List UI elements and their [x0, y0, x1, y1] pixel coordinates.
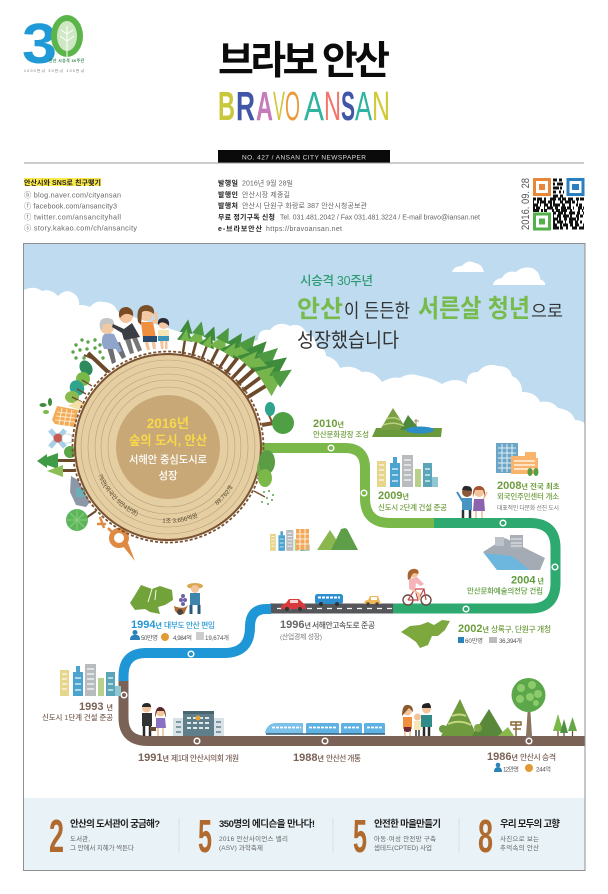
icon: Daebu island map: [130, 585, 173, 614]
right side trees of the stump: [254, 402, 294, 505]
stump text: 서해안 중심도시로: [129, 453, 207, 466]
stump statistics: [98, 474, 233, 524]
SNS links: ⓢ story.kakao.com/ch/ansancity: [24, 224, 137, 232]
headline: 성장했습니다: [297, 329, 399, 352]
publication details: 안산시장 제종길: [242, 190, 290, 199]
item: page 5 Edison: 350명의 에디슨을 만나다!: [219, 818, 315, 830]
item: page 8: [478, 810, 560, 862]
frame border: [24, 244, 585, 870]
title: 브라보 안산: 브라보 안산: [218, 40, 390, 83]
icon: couple: [457, 486, 487, 518]
2004 milestone: 2004 년: [511, 574, 544, 586]
logo: 30th anniversary: 3: [22, 12, 57, 76]
1993 milestone: 신도시 1단계 건설 준공: [42, 712, 113, 722]
title: BRAVO ANSAN: A: [256, 83, 273, 129]
icon: council members: [142, 703, 166, 736]
2002 milestone: 상록구, 단원구 개청: [491, 624, 551, 634]
1993 milestone: 1993 년: [79, 701, 113, 713]
issue banner: NO. 427 / ANSAN CITY NEWSPAPER: [242, 154, 366, 162]
item: page 8: 8: [478, 810, 493, 862]
decorative city and mountains: [270, 523, 358, 551]
road interchange: [97, 517, 135, 561]
1994 milestone: 1994년: [131, 619, 162, 631]
icon: large tree: [512, 678, 546, 736]
publication details: 발행처: [218, 201, 238, 210]
title: BRAVO ANSAN: [218, 83, 390, 129]
item: page 5 safety: 셉테드(CPTED) 사업: [374, 843, 432, 852]
round tree: [66, 509, 96, 531]
item: page 5 Edison: [198, 810, 315, 862]
1996 milestone: [280, 619, 375, 641]
item: page 2: [49, 810, 160, 862]
publication details: e-브라보안산: [218, 224, 263, 233]
item: page 5 safety: [353, 810, 441, 862]
2009 milestone: 신도시 2단계 건설 준공: [378, 502, 447, 512]
stump statistics: 75만(외국인 5만4천명): [98, 474, 138, 516]
2009 milestone: 2009년: [378, 490, 409, 502]
1986 milestone: 1986년: [487, 751, 518, 763]
logo: 30th anniversary: 1000만㎡ 30만㎡ 100만㎡: [24, 68, 84, 73]
SNS links: ⓣ twitter.com/ansancityhall: [24, 212, 121, 222]
SNS links: 안산시와 SNS로 친구맺기: [24, 178, 101, 187]
daughter: [158, 318, 169, 349]
title: BRAVO ANSAN: S: [341, 83, 355, 129]
2008 milestone: 외국인주민센터 개소: [497, 491, 559, 501]
item: page 2: 도서관,: [70, 834, 90, 843]
conifer forest on the tree stump: [175, 318, 298, 407]
stump statistics: 1조 3,656억원: [162, 512, 198, 524]
publication details: 2016년 9월 28일: [242, 178, 293, 188]
title: BRAVO ANSAN: N: [324, 83, 341, 129]
publication details: 무료 정기구독 신청: [218, 212, 275, 222]
1991 milestone: [138, 703, 239, 764]
2010 milestone: 안산문화광장 조성: [313, 429, 369, 439]
2002 milestone: 60만명: [465, 637, 483, 645]
logo: 30th anniversary: 안산 시승격 30주년: [49, 58, 84, 63]
1986 milestone: 12만명: [503, 766, 519, 774]
publication details: [218, 178, 480, 233]
yellow car: [364, 596, 381, 606]
title: BRAVO ANSAN: V: [273, 83, 285, 129]
father: [112, 307, 142, 354]
vehicles on the highway: [281, 594, 381, 611]
2010 milestone: 2010년: [313, 418, 344, 430]
red car: [281, 599, 306, 611]
stump text: 숲의 도시, 안산: [129, 433, 207, 448]
headline: [297, 274, 563, 352]
item: page 5 Edison: 2016 안산사이언스 밸리: [219, 834, 288, 843]
publication details: 발행인: [218, 190, 238, 199]
icon: center building: [496, 443, 538, 476]
tree stump: [72, 352, 264, 542]
1986 milestone: [402, 678, 577, 774]
1994 milestone: 4,984억: [173, 634, 192, 642]
title: BRAVO ANSAN: A: [304, 83, 324, 129]
1988 milestone: 1988년: [293, 752, 324, 764]
1994 milestone: [130, 583, 229, 642]
title: BRAVO ANSAN: N: [372, 83, 390, 129]
headline: 서른살 청년: [418, 295, 530, 323]
logo: 30th anniversary: [22, 12, 84, 76]
left side trees and buildings: [37, 338, 135, 561]
SNS links: [24, 178, 137, 232]
grandfather: [100, 318, 126, 364]
icon: small conifers: [553, 714, 577, 736]
2004 milestone: [467, 535, 545, 596]
2002 milestone: 36,394개: [499, 637, 522, 645]
family on the stump: [100, 305, 169, 364]
SNS links: ⓕ facebook.com/ansancity3: [24, 202, 117, 210]
stump statistics: 89,762개: [215, 484, 233, 504]
panel: infographic frame: [24, 244, 585, 870]
cyclist: [403, 568, 431, 605]
1996 milestone: 서해안고속도로 준공: [312, 620, 375, 630]
mother: [137, 305, 158, 350]
blue bus: [315, 594, 343, 606]
1991 milestone: 1991년: [138, 752, 169, 764]
road nodes: [121, 445, 558, 744]
1988 milestone: 안산선 개통: [326, 753, 361, 763]
side conifers: [37, 453, 76, 477]
1991 milestone: 제1대 안산시의회 개원: [171, 753, 239, 763]
title: BRAVO ANSAN: B: [218, 83, 235, 129]
icon: park: [372, 408, 442, 437]
item: page 2: 안산의 도서관이 궁금해?: [70, 818, 160, 830]
headline: 시승격 30주년: [300, 274, 373, 288]
stump text: 2016년: [147, 416, 189, 431]
item: page 8: 추억속의 안산: [500, 843, 539, 852]
icon: mountains: [439, 699, 514, 736]
title: BRAVO ANSAN: O: [285, 83, 300, 129]
2009 milestone: [377, 455, 447, 512]
2010 milestone: [313, 408, 442, 439]
2008 milestone: [457, 443, 560, 518]
2002 milestone: [401, 620, 551, 648]
icon: subway train: [265, 723, 385, 734]
1994 milestone: 50만명: [141, 634, 158, 642]
item: page 2: 그 안에서 지혜가 싹튼다: [70, 843, 134, 852]
item: page 5 Edison: (ASV) 과학축제: [219, 843, 263, 852]
item: page 5 safety: 아동·여성 안전망 구축: [374, 834, 436, 843]
publication details: 안산시 단원구 화랑로 387 안산시청공보관: [242, 201, 368, 210]
industrial machine: [70, 476, 90, 507]
item: page 5 safety: 5: [353, 810, 367, 862]
icon: city hall: [173, 711, 224, 736]
headline: 안산: [297, 296, 343, 323]
1993 milestone: [42, 664, 121, 722]
stump text: [129, 416, 207, 482]
SNS links: ⓑ blog.naver.com/cityansan: [24, 190, 121, 200]
1994 milestone: 대부도 안산 편입: [164, 620, 215, 630]
1986 milestone: 안산시 승격: [520, 752, 556, 762]
2008 milestone: 2008년 전국 최초: [497, 480, 560, 492]
issue banner: [24, 150, 584, 164]
icon: art center building: [483, 535, 545, 570]
item: page 8: 우리 모두의 고향: [500, 818, 560, 830]
road timeline: [124, 448, 585, 741]
publication details: Tel. 031.481.2042 / Fax 031.481.3224 / E-mail bravo@iansan.net: [280, 214, 480, 222]
icon: signpost: [511, 722, 521, 736]
publication details: https://bravoansan.net: [266, 226, 342, 233]
headline: 으로: [531, 302, 563, 321]
1996 milestone: (산업경제 성장): [280, 632, 322, 641]
title: BRAVO ANSAN: A: [355, 83, 372, 129]
2002 milestone: 2002년: [458, 623, 489, 635]
2004 milestone: 안산문화예술의전당 건립: [467, 586, 543, 596]
tree with dotted leaves: [71, 338, 108, 372]
1988 milestone: [265, 723, 385, 764]
clouds: [24, 262, 585, 560]
icon: family: [402, 703, 432, 736]
orange building: [52, 400, 86, 427]
item: page 5 Edison: 5: [198, 810, 212, 862]
panel: contents strip: [24, 798, 585, 870]
1986 milestone: 244억: [536, 766, 551, 774]
QR code: [533, 180, 584, 229]
2008 milestone: 대표적인 다문화 선진 도시: [497, 504, 559, 512]
item: page 8: 사진으로 보는: [500, 834, 539, 843]
icon: farmer: [174, 583, 203, 615]
title: BRAVO ANSAN: R: [236, 83, 255, 129]
publication details: 발행일: [218, 178, 238, 188]
sprig: [40, 398, 52, 414]
1994 milestone: 19,674개: [205, 634, 229, 642]
item: page 5 safety: 안전한 마을만들기: [374, 818, 441, 830]
item: page 2: 2: [49, 810, 64, 862]
windmill: [50, 430, 72, 447]
icon: city map: [401, 620, 450, 648]
headline: 이 든든한: [344, 300, 410, 322]
1996 milestone: 1996년: [280, 619, 311, 631]
issue date (vertical): 2016. 09. 28: [520, 178, 532, 230]
stump text: 성장: [158, 470, 178, 482]
